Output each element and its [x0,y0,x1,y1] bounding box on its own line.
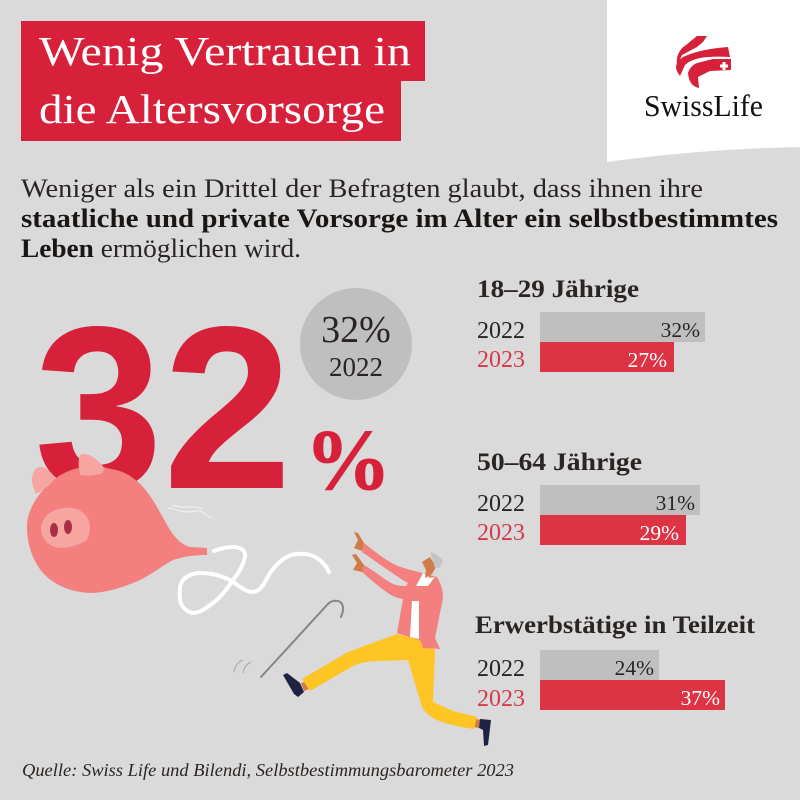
chart: 18-29 Jährige: 2023 [477,347,525,373]
chart: Erwerbstätige in Teilzeit: Erwerbstätige in Teilzeit [475,612,756,639]
balloon string [168,505,329,613]
chart: 18-29 Jährige: 27% [628,348,667,372]
chart: Erwerbstätige in Teilzeit: 37% [681,686,720,710]
shirt [410,573,435,639]
pig snout [41,508,90,548]
intro text: Weniger als ein Drittel der Befragten glaubt, dass ihnen ihre [21,174,703,203]
chart: 50-64 Jährige: 29% [640,521,679,545]
chart: 18-29 Jährige: 32% [661,318,700,342]
ankles [301,682,481,728]
pig nostrils [50,520,72,537]
illustration: piggy balloon [27,454,329,613]
big percent sign: % [305,412,391,508]
legs [302,634,477,729]
chart: Erwerbstätige in Teilzeit [475,612,756,712]
circle: 2022 value [300,288,412,400]
circle: 2022 value: 32% [321,309,391,351]
intro text [21,174,778,263]
logo panel [607,0,800,162]
chart: 50-64 Jährige: 31% [656,491,695,515]
big number 32: 32 [34,279,292,538]
intro text: Leben ermöglichen wird. [21,234,301,263]
icon: Swiss Life emblem [676,36,731,88]
chart: Erwerbstätige in Teilzeit: 2022 [477,656,525,682]
logo panel: SwissLife [644,88,763,123]
hands, head and hair [352,532,364,572]
chart: Erwerbstätige in Teilzeit: 2023 [477,686,525,712]
chart: 18-29 Jährige: 18–29 Jährige [477,276,639,303]
shoes [283,673,304,697]
chart: 50-64 Jährige: 50–64 Jährige [477,449,642,476]
chart: 18-29 Jährige: 2022 [477,318,525,344]
chart: 50-64 Jährige: 2022 [477,491,525,517]
jacket and arms [362,543,443,649]
title: Wenig Vertrauen in [39,28,411,74]
chart: 50-64 Jährige: 2023 [477,520,525,546]
cane [261,601,343,677]
chart: Erwerbstätige in Teilzeit: 24% [615,656,654,680]
intro text: staatliche und private Vorsorge im Alter ein selbstbestimmtes [21,204,778,233]
illustration: running man and cane [234,532,491,746]
source: Quelle: Swiss Life und Bilendi, Selbstbestimmungsbarometer 2023 [22,760,514,780]
chart: 18-29 Jährige [477,276,705,373]
title: die Altersvorsorge [39,86,385,132]
chart: 50-64 Jährige [477,449,700,546]
title [21,21,425,141]
pig ears [32,454,104,494]
circle: 2022 value: 2022 [329,352,383,382]
